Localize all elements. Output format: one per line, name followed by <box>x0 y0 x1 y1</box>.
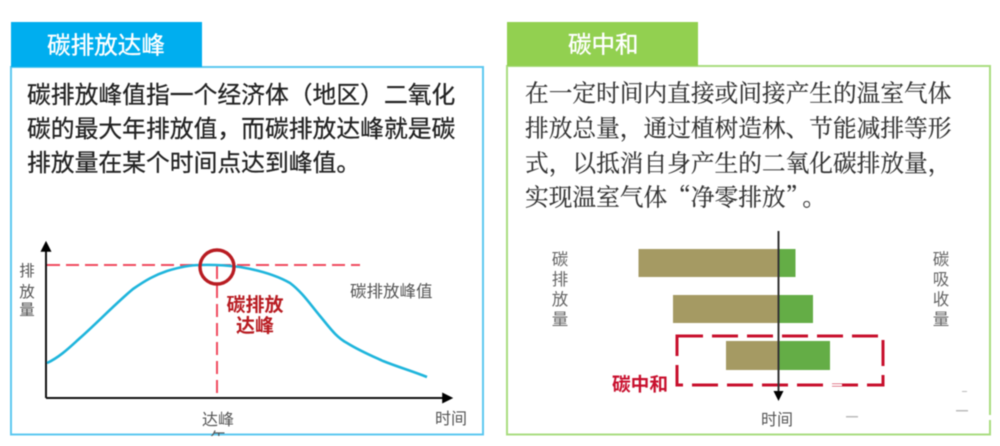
absorption label: 碳 <box>933 250 950 269</box>
tab: carbon peak heading <box>11 22 202 67</box>
y axis label: 量 <box>19 302 35 319</box>
y axis label: 放 <box>19 283 35 301</box>
peak value label: 碳排放峰值 <box>350 282 432 301</box>
text block: carbon neutrality definition: 排放总量，通过植树造林、节能减排等形 <box>525 110 952 144</box>
emissions label: 排 <box>552 270 568 289</box>
absorption label: 量 <box>933 311 949 329</box>
text block: carbon neutrality definition: 在一定时间内直接或间接产生的温室气体 <box>525 74 952 108</box>
tab: carbon peak heading: 碳排放达峰 <box>47 32 165 60</box>
tab: carbon neutrality heading: 碳中和 <box>568 32 638 58</box>
panel: carbon neutrality <box>507 22 992 434</box>
watermark remnants <box>831 384 992 420</box>
absorption label: 收 <box>933 290 949 309</box>
peak level dashed line <box>47 264 360 266</box>
peak year label: 达峰 <box>202 411 234 429</box>
time label: 时间 <box>761 411 793 429</box>
y axis label <box>19 262 35 319</box>
time arrow <box>774 231 784 401</box>
emission bars <box>638 249 778 370</box>
emissions curve <box>47 265 427 377</box>
line chart: emissions peak curve <box>19 243 467 446</box>
panel: carbon peak <box>11 22 483 446</box>
peak callout: 碳排放 <box>226 294 284 316</box>
peak year dashed line <box>216 266 218 398</box>
bar chart: emissions vs absorption <box>552 231 950 429</box>
emissions label <box>552 250 569 329</box>
text block: carbon peak definition: 碳排放峰值指一个经济体（地区）二氧化 <box>27 82 455 109</box>
text block: carbon neutrality definition: 实现温室气体“净零排放”。 <box>525 178 826 212</box>
time axis label: 时间 <box>435 410 467 428</box>
absorption bars <box>778 249 830 370</box>
panel border: carbon peak <box>11 67 483 434</box>
absorption label: 吸 <box>933 271 949 289</box>
absorption label <box>933 250 950 329</box>
peak callout: 达峰 <box>236 315 274 337</box>
text block: carbon peak definition: 排放量在某个时间点达到峰值。 <box>27 150 360 177</box>
chart axes <box>46 243 451 398</box>
neutrality callout: 碳中和 <box>612 374 668 395</box>
text block: carbon neutrality definition: 式，以抵消自身产生的二氧化碳排放量， <box>525 144 951 178</box>
y axis label: 排 <box>19 262 35 280</box>
peak marker circle <box>200 250 234 284</box>
emissions label: 碳 <box>552 250 569 269</box>
peak callout <box>226 294 284 337</box>
emissions label: 量 <box>552 311 568 329</box>
text block: carbon peak definition: 碳的最大年排放值，而碳排放达峰就是碳 <box>27 116 456 143</box>
text block: carbon neutrality definition <box>525 74 952 212</box>
panel border: carbon neutrality <box>507 66 990 434</box>
text block: carbon peak definition <box>27 82 456 177</box>
tab: carbon neutrality heading <box>507 22 698 66</box>
emissions label: 放 <box>552 290 569 309</box>
neutrality dashed box <box>677 336 883 385</box>
peak year label <box>202 410 234 437</box>
